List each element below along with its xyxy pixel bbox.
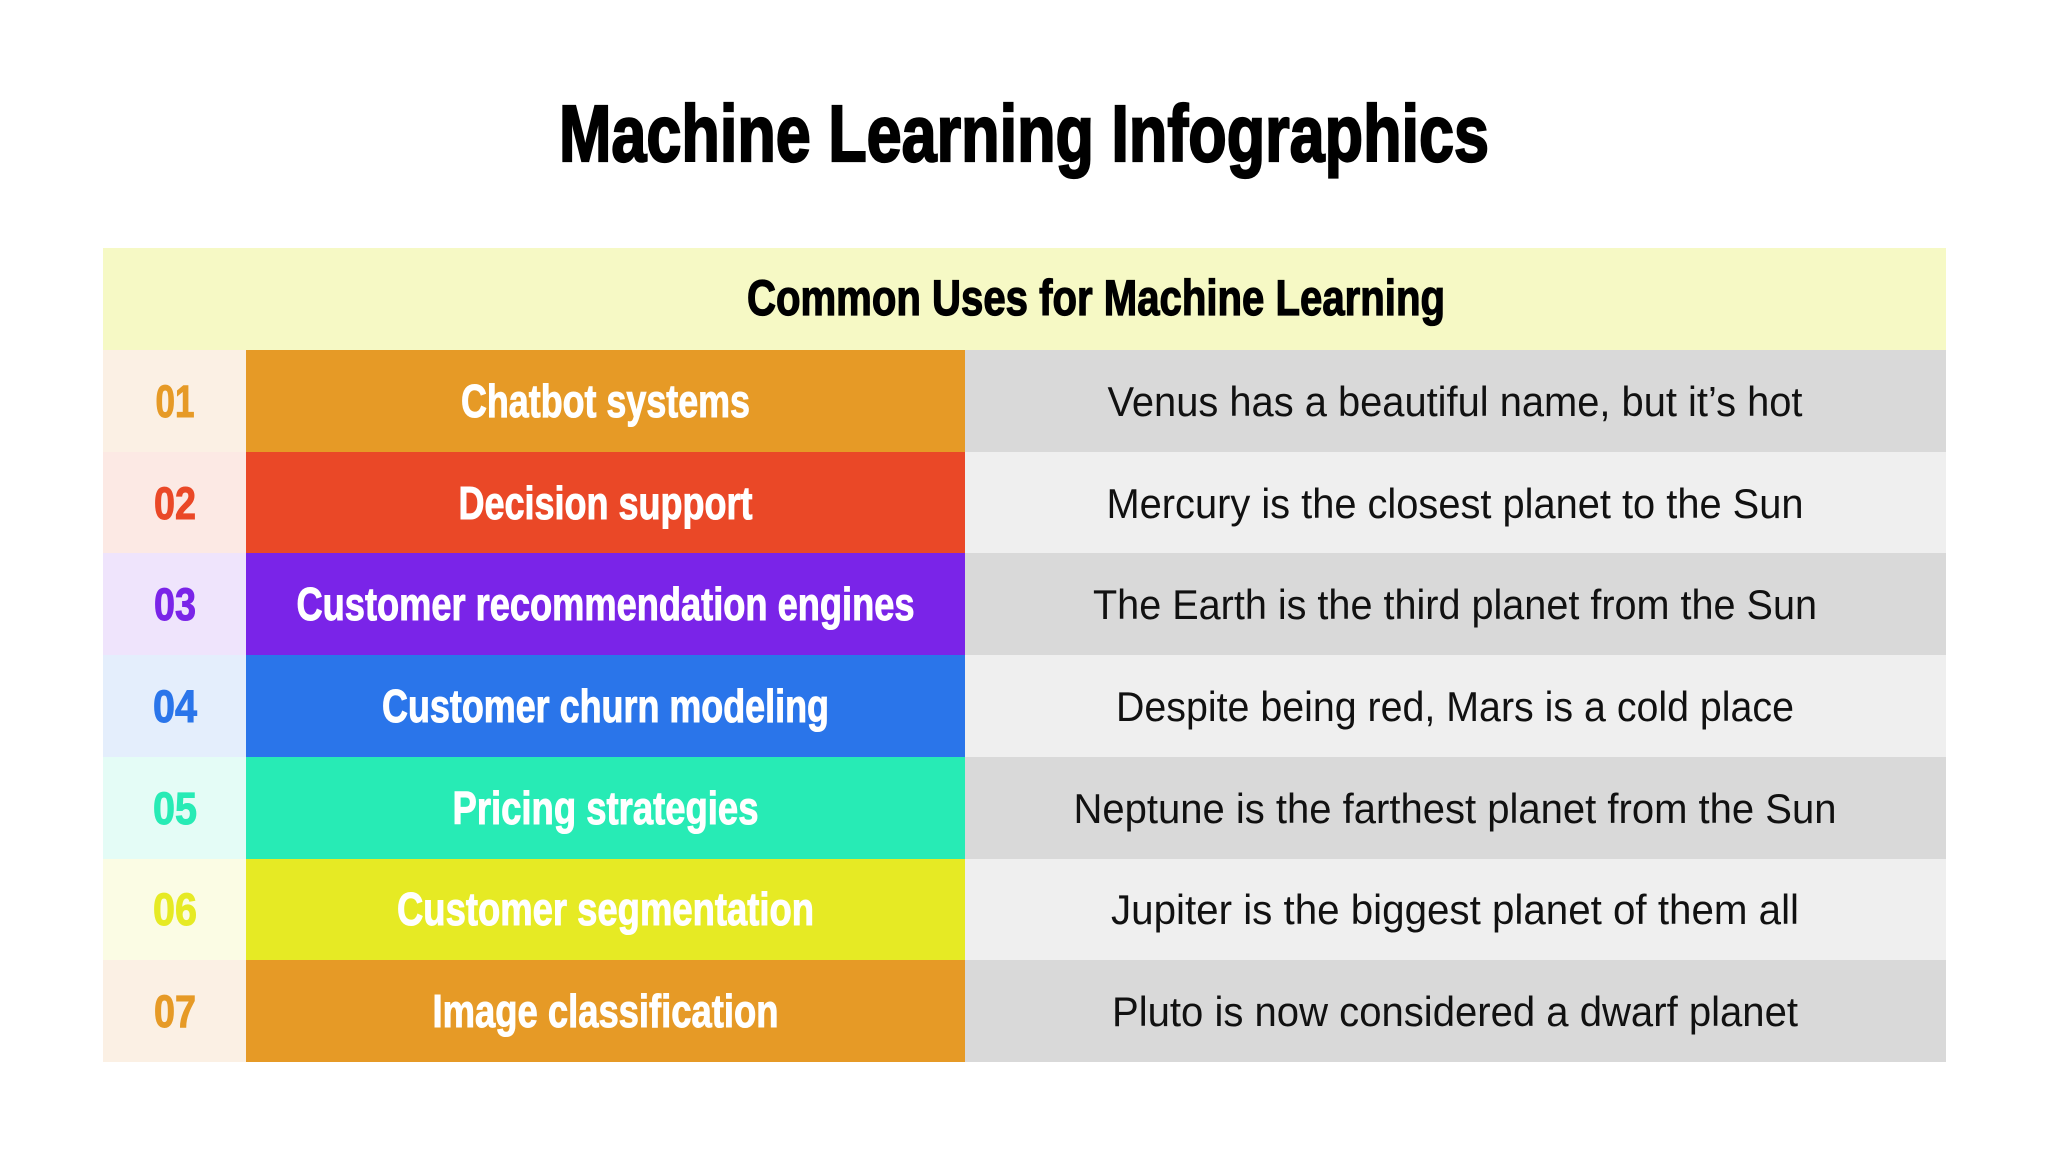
row 03: Customer recommendation engines — [296, 578, 914, 630]
row 07 — [103, 960, 1946, 1062]
table — [103, 248, 1946, 1062]
row 03: 03 — [154, 579, 196, 630]
row 02 — [103, 452, 1946, 554]
row 04: 04 — [153, 681, 197, 732]
row 06 — [103, 859, 1946, 961]
row 06: Customer segmentation — [397, 883, 814, 935]
row 05: Pricing strategies — [452, 782, 758, 834]
row 02: Decision support — [458, 477, 752, 529]
row 04 — [103, 655, 1946, 757]
table header — [103, 248, 1946, 350]
title: Machine Learning Infographics — [559, 89, 1489, 178]
row 01: Venus has a beautiful name, but it’s hot — [1108, 378, 1803, 425]
row 02: Mercury is the closest planet to the Sun — [1106, 480, 1804, 527]
row 06: 06 — [153, 884, 197, 935]
row 05 — [103, 757, 1946, 859]
row 03 — [103, 553, 1946, 655]
row 07: Image classification — [432, 985, 778, 1037]
row 05: 05 — [153, 783, 197, 834]
row 07: Pluto is now considered a dwarf planet — [1112, 988, 1798, 1035]
row 04: Customer churn modeling — [382, 680, 829, 732]
row 05: Neptune is the farthest planet from the Sun — [1074, 785, 1836, 832]
row 01 — [103, 350, 1946, 452]
row 03: The Earth is the third planet from the Sun — [1093, 581, 1817, 628]
row 01: Chatbot systems — [461, 375, 750, 427]
row 02: 02 — [154, 478, 196, 529]
row 01: 01 — [156, 376, 194, 427]
row 06: Jupiter is the biggest planet of them all — [1111, 886, 1799, 933]
row 07: 07 — [154, 986, 196, 1037]
row 04: Despite being red, Mars is a cold place — [1116, 683, 1794, 730]
table header: Common Uses for Machine Learning — [747, 270, 1445, 326]
